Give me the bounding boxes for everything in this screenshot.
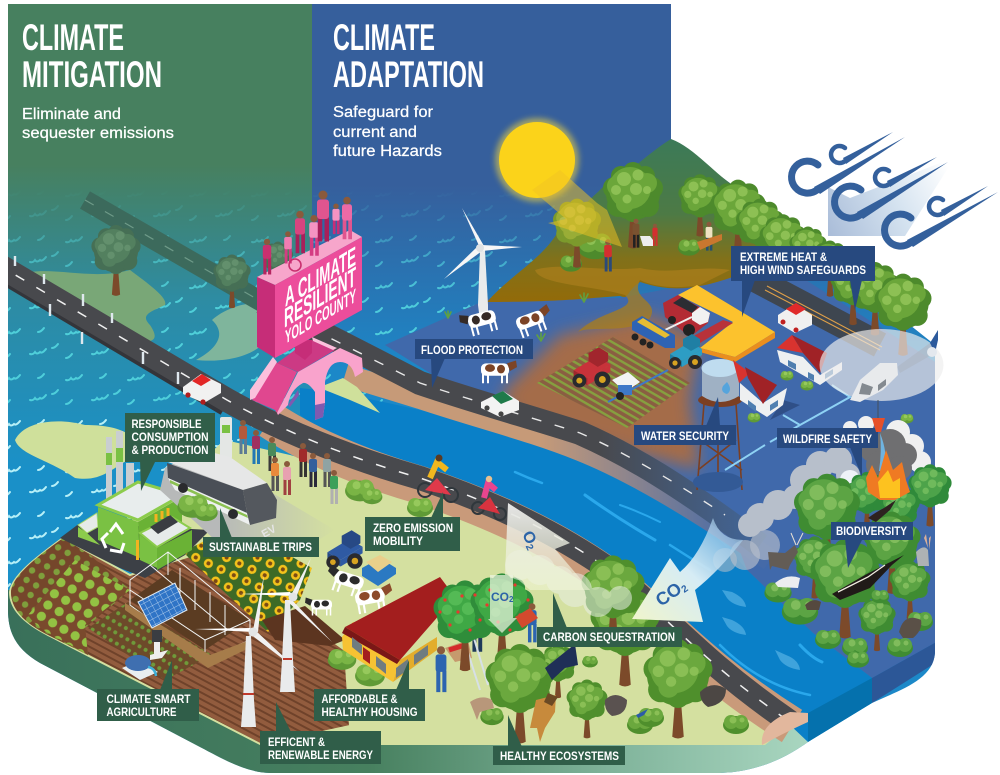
ranch house [777, 335, 842, 385]
carbon dioxide arrow down: CO [491, 590, 509, 604]
turbine near the hill [444, 208, 522, 313]
upper right road [753, 278, 882, 350]
pier shadows [288, 390, 325, 420]
people on sign [263, 190, 352, 274]
wind turbine one [195, 575, 300, 727]
foreground trees [480, 555, 749, 744]
side of forest plateau [872, 643, 935, 703]
roadside bushes [177, 480, 433, 686]
label: sustainable trips: SUSTAINABLE TRIPS [209, 542, 312, 554]
hill [487, 139, 815, 302]
sun rays arrow [532, 170, 622, 247]
label: responsible consumption [125, 413, 215, 491]
label: biodiversity: BIODIVERSITY [836, 526, 907, 538]
fire [866, 450, 910, 500]
arch bridge [250, 337, 363, 420]
recycling symbol [102, 524, 124, 552]
subheading: mitigation [22, 106, 174, 142]
front edge of the land [0, 590, 808, 775]
oxygen arrow [505, 503, 590, 590]
subheading: adaptation [333, 104, 442, 160]
heading: climate adaptation: CLIMATE [333, 17, 435, 58]
label: healthy ecosystems [493, 715, 625, 765]
forest trees [764, 474, 933, 668]
label: extreme heat and high wind [731, 246, 875, 317]
bridge left wall [252, 362, 297, 413]
cabbage field [11, 538, 130, 655]
combine harvester [663, 295, 733, 343]
dark soil strip [262, 606, 345, 646]
fish [722, 590, 800, 670]
animals on lower land [470, 644, 726, 742]
orchard trees [434, 573, 534, 671]
trees along edge [810, 241, 932, 356]
subheading: adaptation: future Hazards [333, 143, 442, 160]
pale land under the arch [325, 378, 380, 413]
label: climate smart agriculture: CLIMATE SMART [106, 694, 190, 706]
label: wildfire safety: WILDFIRE SAFETY [783, 434, 872, 446]
helicopter downwash [820, 329, 944, 401]
carbon dioxide arrow down: 2 [509, 595, 514, 604]
label: responsible consumption: & PRODUCTION [132, 445, 208, 457]
carbon dioxide arrow: 2 [680, 583, 691, 596]
electric bus [167, 448, 277, 525]
river front side [808, 678, 872, 742]
water bucket [872, 418, 885, 432]
heading: climate mitigation: MITIGATION [22, 54, 162, 95]
lower road [0, 263, 792, 726]
farmer with crate [515, 603, 538, 642]
bridge left rim [250, 357, 277, 400]
label: wildfire safety [777, 428, 878, 477]
carbon dioxide arrow: CO [652, 578, 685, 610]
red tractor [572, 347, 610, 388]
blue tractor and hay trailer [326, 530, 396, 586]
subheading: adaptation: Safeguard for [333, 104, 433, 121]
label: flood protection [415, 339, 533, 388]
agriculture fields [10, 525, 350, 745]
subheading: mitigation: Eliminate and [22, 106, 121, 123]
label: flood protection: FLOOD PROTECTION [421, 345, 523, 357]
road posts [15, 256, 178, 384]
bridge arches [277, 348, 363, 420]
grain trailer [632, 316, 675, 348]
wind turbine two [240, 558, 332, 692]
water pump [122, 655, 158, 680]
EV lettering: EV [260, 523, 279, 541]
neck [295, 340, 312, 360]
sun [499, 122, 575, 198]
label: efficient and renewable energy: EFFICENT & [268, 737, 325, 749]
heading: climate adaptation [333, 17, 484, 95]
label: responsible consumption: CONSUMPTION [132, 432, 208, 444]
label: zero emission mobility: MOBILITY [373, 536, 423, 548]
subheading: mitigation: sequester emissions [22, 125, 174, 142]
label: affordable housing: AFFORDABLE & [322, 694, 398, 706]
water canals [725, 385, 850, 470]
label: water security: WATER SECURITY [641, 431, 729, 443]
cows by house [305, 564, 366, 616]
label: zero emission mobility [365, 492, 460, 551]
cyclist two [472, 476, 506, 520]
heading: climate mitigation [22, 17, 162, 95]
label: climate smart agriculture: AGRICULTURE [106, 707, 177, 719]
rear trees [91, 225, 293, 308]
chimneys [106, 431, 134, 499]
factory pad [60, 523, 210, 578]
crop field [537, 337, 690, 428]
EV bus lane [160, 450, 335, 545]
label: water security [634, 397, 736, 445]
tree in sunlight [553, 199, 601, 268]
label: affordable housing [314, 660, 425, 721]
carbon dioxide arrow [632, 518, 743, 622]
bridge deck [277, 340, 335, 372]
cars [183, 374, 519, 417]
river [300, 388, 872, 742]
adaptation background panel [312, 4, 952, 775]
people waiting [239, 420, 338, 504]
island: rear middle [196, 303, 262, 361]
brown cow by house [354, 583, 395, 614]
label: extreme heat and high wind: EXTREME HEAT & [740, 252, 827, 264]
subheading: adaptation: current and [333, 124, 417, 141]
small island in river [375, 428, 436, 448]
bright cabbage patch [28, 560, 130, 655]
carbon cloud [505, 550, 632, 617]
label: biodiversity [831, 522, 913, 568]
sign text: RESILIENT [284, 261, 356, 334]
EV charger [220, 417, 232, 459]
sprayer [608, 370, 668, 402]
label: zero emission mobility: ZERO EMISSION [373, 523, 453, 535]
solar panel [138, 583, 187, 660]
cyclist one [418, 454, 458, 502]
white smoke [799, 470, 860, 521]
sign front [275, 237, 362, 358]
lower land [120, 440, 790, 745]
pink sign structure: A CLIMATE [285, 240, 356, 313]
red and white car on causeway [183, 374, 221, 405]
sign text: YOLO COUNTY [285, 285, 356, 349]
label: affordable housing: HEALTHY HOUSING [322, 707, 418, 719]
label: responsible consumption: RESPONSIBLE [132, 419, 202, 431]
bridge deck rim [312, 337, 337, 350]
pink sign structure [250, 190, 363, 420]
label: carbon sequestration: CARBON SEQUESTRATION [543, 632, 675, 644]
meadow plants [445, 293, 588, 341]
light smoke [713, 446, 860, 572]
sun glow [495, 118, 579, 202]
label: carbon sequestration [537, 593, 682, 647]
label: extreme heat and high wind: HIGH WIND SAFEGUARDS [740, 265, 866, 277]
upper road [262, 302, 770, 560]
green and white car [481, 391, 519, 417]
label: healthy ecosystems: HEALTHY ECOSYSTEMS [500, 751, 619, 763]
hill sunlit path [535, 267, 730, 332]
greenhouse [125, 552, 250, 668]
sign text [284, 240, 356, 349]
waves [8, 205, 554, 405]
carbon dioxide arrow down [488, 575, 517, 633]
road end cap [762, 712, 808, 745]
mitigation background panel [8, 4, 312, 775]
helicopter [850, 330, 938, 418]
label: efficient and renewable energy: RENEWABLE ENERGY [268, 750, 373, 762]
forest animals [768, 500, 931, 638]
river highlights [515, 472, 822, 695]
orchard workers [436, 608, 488, 692]
sign top [257, 230, 362, 285]
hill people [604, 219, 722, 272]
heading: climate adaptation: ADAPTATION [333, 54, 484, 95]
fire smoke [843, 416, 931, 480]
wind icon [792, 132, 998, 247]
lower waves [8, 419, 278, 588]
cows on flood meadow [458, 304, 556, 383]
island: bottom left [15, 421, 135, 479]
sprout field [88, 602, 212, 680]
label: sustainable trips [203, 508, 319, 557]
label: efficient and renewable energy [260, 702, 381, 764]
label: climate smart agriculture [97, 660, 199, 721]
teal tractor [669, 334, 702, 369]
oxygen arrow: 2 [523, 543, 535, 553]
sign side [257, 277, 275, 358]
bushes on plateau [748, 371, 914, 424]
factory [78, 431, 192, 570]
white car [778, 303, 812, 333]
brown soil glow around fields [500, 315, 700, 470]
adaptation land [385, 270, 940, 678]
house: affordable housing [342, 577, 455, 682]
oxygen arrow: O [518, 529, 539, 547]
water tower [693, 359, 743, 492]
forest [846, 464, 952, 543]
yellow harvest platform [678, 285, 775, 362]
hill trees [560, 162, 827, 282]
island: rear left [30, 270, 165, 342]
sunflower field [183, 525, 312, 632]
farm house [733, 360, 800, 420]
rear road [85, 200, 262, 302]
heading: climate mitigation: CLIMATE [22, 17, 124, 58]
